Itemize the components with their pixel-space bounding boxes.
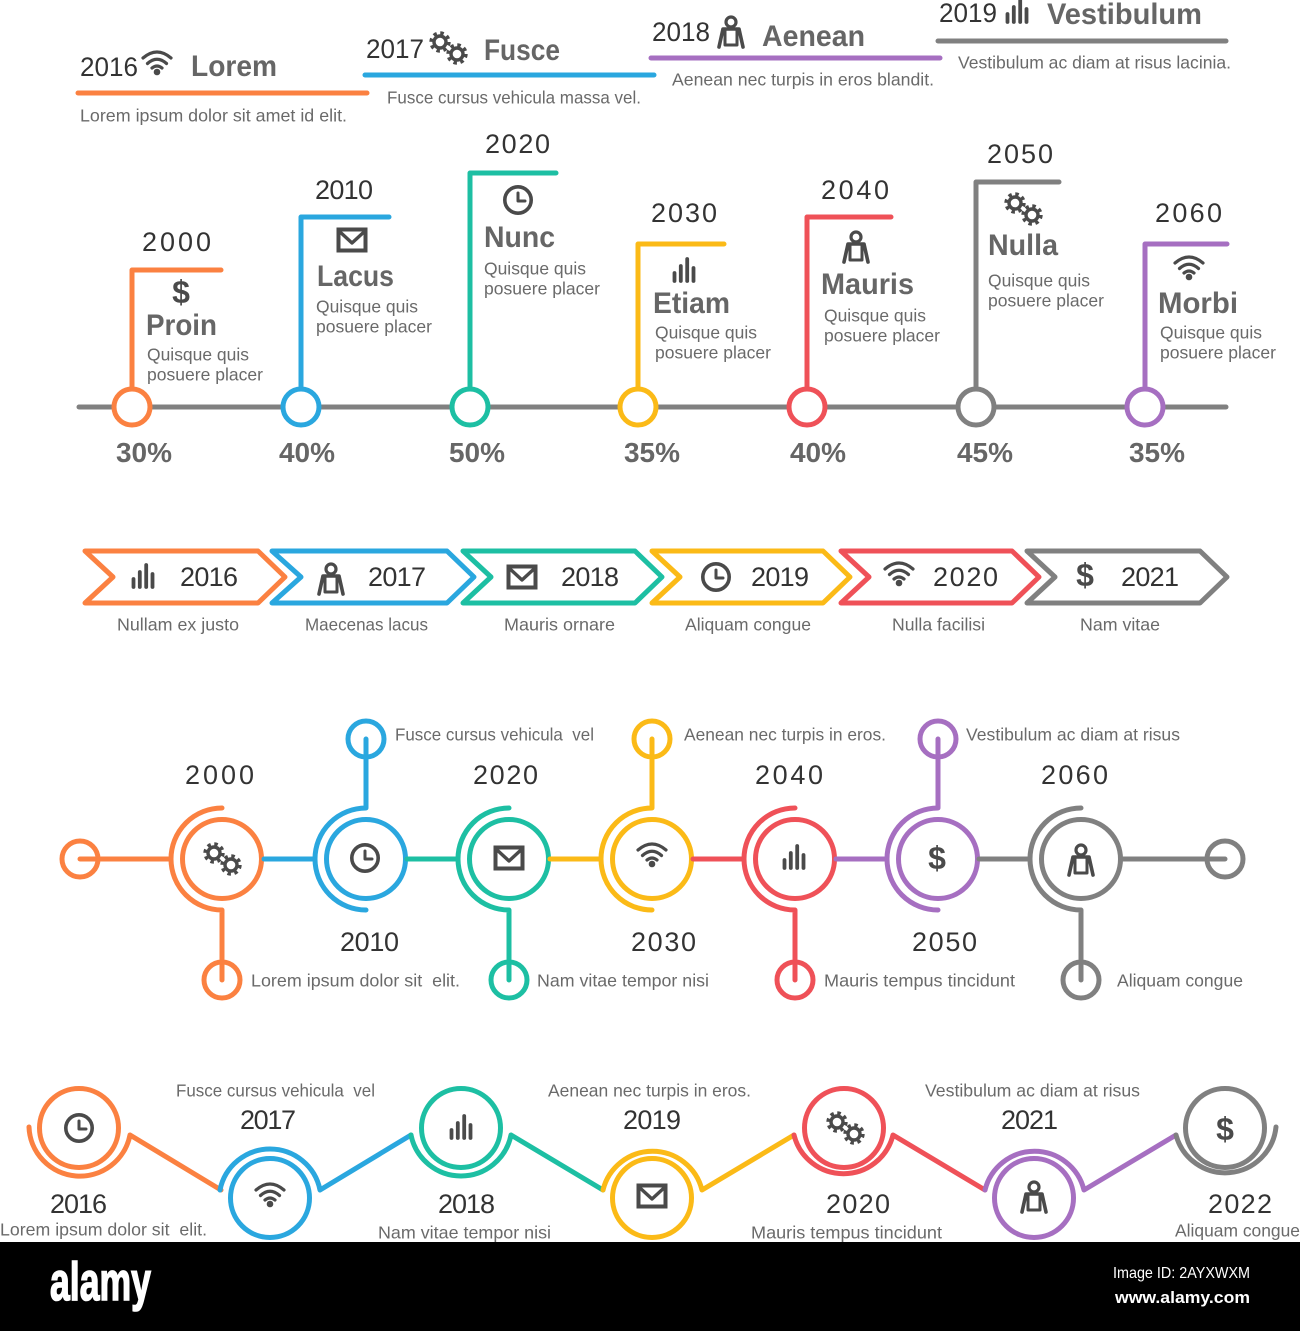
start node: [62, 841, 170, 877]
flag 2020 Nunc: [449, 129, 600, 468]
header item 2017 Fusce: Fusce: [484, 34, 560, 67]
node 2000: [171, 760, 460, 998]
flag 2000 Proin: 30%: [116, 437, 172, 468]
zigzag node 2019: 2019: [623, 1105, 681, 1135]
zigzag node 2018: Nam vitae tempor nisi: [378, 1223, 551, 1243]
flag 2060 Morbi: Quisque quis: [1160, 323, 1262, 343]
zigzag node 2016: [0, 1088, 221, 1240]
node 2040: Mauris tempus tincidunt: [824, 971, 1015, 991]
chevron 2017: Maecenas lacus: [305, 615, 428, 635]
flag 2060 Morbi: Morbi: [1158, 287, 1238, 320]
zigzag node 2018: [378, 1088, 603, 1243]
flag 2000 Proin: posuere placer: [147, 365, 263, 385]
node 2010: Fusce cursus vehicula vel: [395, 725, 594, 745]
header item 2016 Lorem: 2016: [80, 52, 138, 82]
node 2050: [836, 721, 1180, 957]
flag 2010 Lacus: posuere placer: [316, 317, 432, 337]
node 2050: Vestibulum ac diam at risus: [966, 725, 1180, 745]
chevron 2016: 2016: [180, 562, 238, 592]
node 2050: 2050: [912, 927, 977, 957]
chevron 2021: 2021: [1121, 562, 1179, 592]
node 2000: Lorem ipsum dolor sit elit.: [251, 971, 460, 991]
flag 2020 Nunc: posuere placer: [484, 279, 600, 299]
footer bar: [0, 1242, 1300, 1331]
node 2040: [693, 760, 1015, 998]
flag 2050 Nulla: 2050: [987, 139, 1053, 169]
header item 2017 Fusce: 2017: [366, 34, 424, 64]
flag 2060 Morbi: posuere placer: [1160, 343, 1276, 363]
flag 2030 Etiam: [620, 198, 771, 468]
header item 2018 Aenean: [651, 17, 940, 90]
zigzag node 2017: [176, 1081, 411, 1238]
header timeline: [78, 0, 1231, 126]
node 2020: 2020: [473, 760, 538, 790]
flag 2060 Morbi: [1127, 198, 1276, 468]
zigzag node 2019: [548, 1081, 794, 1238]
node 2010: [264, 721, 594, 957]
zigzag node 2016: 2016: [50, 1189, 107, 1219]
header item 2016 Lorem: Lorem ipsum dolor sit amet id elit.: [80, 106, 347, 126]
node 2060: Aliquam congue: [1117, 971, 1243, 991]
flag 2050 Nulla: [957, 139, 1104, 468]
flag 2000 Proin: Quisque quis: [147, 345, 249, 365]
chevron 2019: 2019: [751, 562, 809, 592]
chevron 2021: Nam vitae: [1080, 615, 1160, 635]
chevron 2017: 2017: [368, 562, 426, 592]
node 2040: 2040: [755, 760, 823, 790]
chevron 2020: Nulla facilisi: [892, 615, 985, 635]
flag 2040 Mauris: 2040: [821, 175, 889, 205]
flag 2020 Nunc: Nunc: [484, 221, 555, 254]
flag 2030 Etiam: Quisque quis: [655, 323, 757, 343]
flag 2050 Nulla: 45%: [957, 437, 1013, 468]
chevron 2020: [841, 551, 1039, 635]
flag 2030 Etiam: 2030: [651, 198, 717, 228]
flag 2060 Morbi: 35%: [1129, 437, 1185, 468]
node 2010: 2010: [340, 927, 399, 957]
flag 2010 Lacus: Lacus: [317, 260, 394, 293]
header item 2017 Fusce: Fusce cursus vehicula massa vel.: [387, 88, 641, 108]
flag 2020 Nunc: 2020: [485, 129, 550, 159]
flag 2050 Nulla: posuere placer: [988, 291, 1104, 311]
flag timeline: [79, 129, 1276, 468]
chevron 2021: $: [1076, 557, 1094, 593]
zigzag node 2022: [1175, 1088, 1300, 1241]
zigzag timeline: [0, 1081, 1300, 1243]
chevron 2019: [652, 551, 850, 635]
flag 2050 Nulla: Nulla: [988, 229, 1058, 262]
flag 2050 Nulla: Quisque quis: [988, 271, 1090, 291]
chevron 2016: [85, 551, 285, 635]
header item 2018 Aenean: Aenean nec turpis in eros blandit.: [672, 70, 934, 90]
zigzag node 2022: $: [1216, 1111, 1234, 1147]
flag 2000 Proin: Proin: [146, 309, 217, 342]
chevron 2019: Aliquam congue: [685, 615, 811, 635]
chevron 2018: Mauris ornare: [504, 615, 615, 635]
zigzag node 2020: 2020: [826, 1189, 890, 1219]
zigzag node 2020: [751, 1088, 985, 1243]
flag 2020 Nunc: 50%: [449, 437, 505, 468]
node 2020: Nam vitae tempor nisi: [537, 971, 709, 991]
chevron 2018: 2018: [561, 562, 619, 592]
flag 2010 Lacus: 2010: [315, 175, 373, 205]
chevron 2017: [272, 551, 474, 635]
node 2030: Aenean nec turpis in eros.: [684, 725, 886, 745]
zigzag node 2016: Lorem ipsum dolor sit elit.: [0, 1220, 207, 1240]
circle node timeline: [62, 721, 1243, 998]
header item 2019 Vestibulum: [938, 0, 1231, 73]
flag 2030 Etiam: Etiam: [653, 287, 730, 320]
node 2030: 2030: [631, 927, 696, 957]
zigzag node 2018: 2018: [438, 1189, 495, 1219]
zigzag node 2017: 2017: [240, 1105, 296, 1135]
zigzag node 2022: 2022: [1208, 1189, 1272, 1219]
flag 2020 Nunc: Quisque quis: [484, 259, 586, 279]
header item 2019 Vestibulum: Vestibulum ac diam at risus lacinia.: [958, 53, 1231, 73]
zigzag node 2019: Aenean nec turpis in eros.: [548, 1081, 751, 1101]
flag 2030 Etiam: 35%: [624, 437, 680, 468]
node 2020: [407, 760, 709, 998]
header item 2017 Fusce: [365, 33, 654, 108]
chevron 2020: 2020: [933, 562, 998, 592]
flag 2040 Mauris: 40%: [790, 437, 846, 468]
flag 2010 Lacus: [279, 175, 432, 468]
flag 2040 Mauris: Quisque quis: [824, 306, 926, 326]
zigzag node 2021: 2021: [1001, 1105, 1058, 1135]
flag 2010 Lacus: Quisque quis: [316, 297, 418, 317]
node 2060: 2060: [1041, 760, 1108, 790]
flag 2000 Proin: [114, 227, 263, 468]
chevron 2021: [1027, 551, 1227, 635]
flag 2000 Proin: 2000: [142, 227, 211, 257]
flag 2040 Mauris: Mauris: [821, 268, 914, 301]
chevron 2016: Nullam ex justo: [117, 615, 239, 635]
node 2000: 2000: [185, 760, 254, 790]
flag 2010 Lacus: 40%: [279, 437, 335, 468]
zigzag node 2021: [925, 1081, 1176, 1238]
chevron timeline: [85, 551, 1227, 635]
zigzag node 2021: Vestibulum ac diam at risus: [925, 1081, 1140, 1101]
chevron 2018: [463, 551, 662, 635]
zigzag node 2022: Aliquam congue: [1175, 1221, 1300, 1241]
flag 2040 Mauris: posuere placer: [824, 326, 940, 346]
node 2050: $: [928, 840, 946, 876]
header item 2018 Aenean: Aenean: [762, 20, 865, 53]
image id: Image ID: 2AYXWXM: [1113, 1265, 1250, 1282]
node 2030: [550, 721, 886, 957]
header item 2018 Aenean: 2018: [652, 17, 710, 47]
end node: [1123, 841, 1243, 877]
website: www.alamy.com: [1114, 1288, 1250, 1307]
logo: alamy: [50, 1252, 151, 1312]
flag 2040 Mauris: [789, 175, 940, 468]
flag 2060 Morbi: 2060: [1155, 198, 1222, 228]
header item 2016 Lorem: Lorem: [191, 50, 277, 83]
zigzag node 2020: Mauris tempus tincidunt: [751, 1223, 942, 1243]
flag 2030 Etiam: posuere placer: [655, 343, 771, 363]
header item 2016 Lorem: [78, 50, 367, 126]
zigzag node 2017: Fusce cursus vehicula vel: [176, 1081, 375, 1101]
node 2060: [979, 760, 1243, 998]
flag 2000 Proin: $: [172, 274, 190, 310]
